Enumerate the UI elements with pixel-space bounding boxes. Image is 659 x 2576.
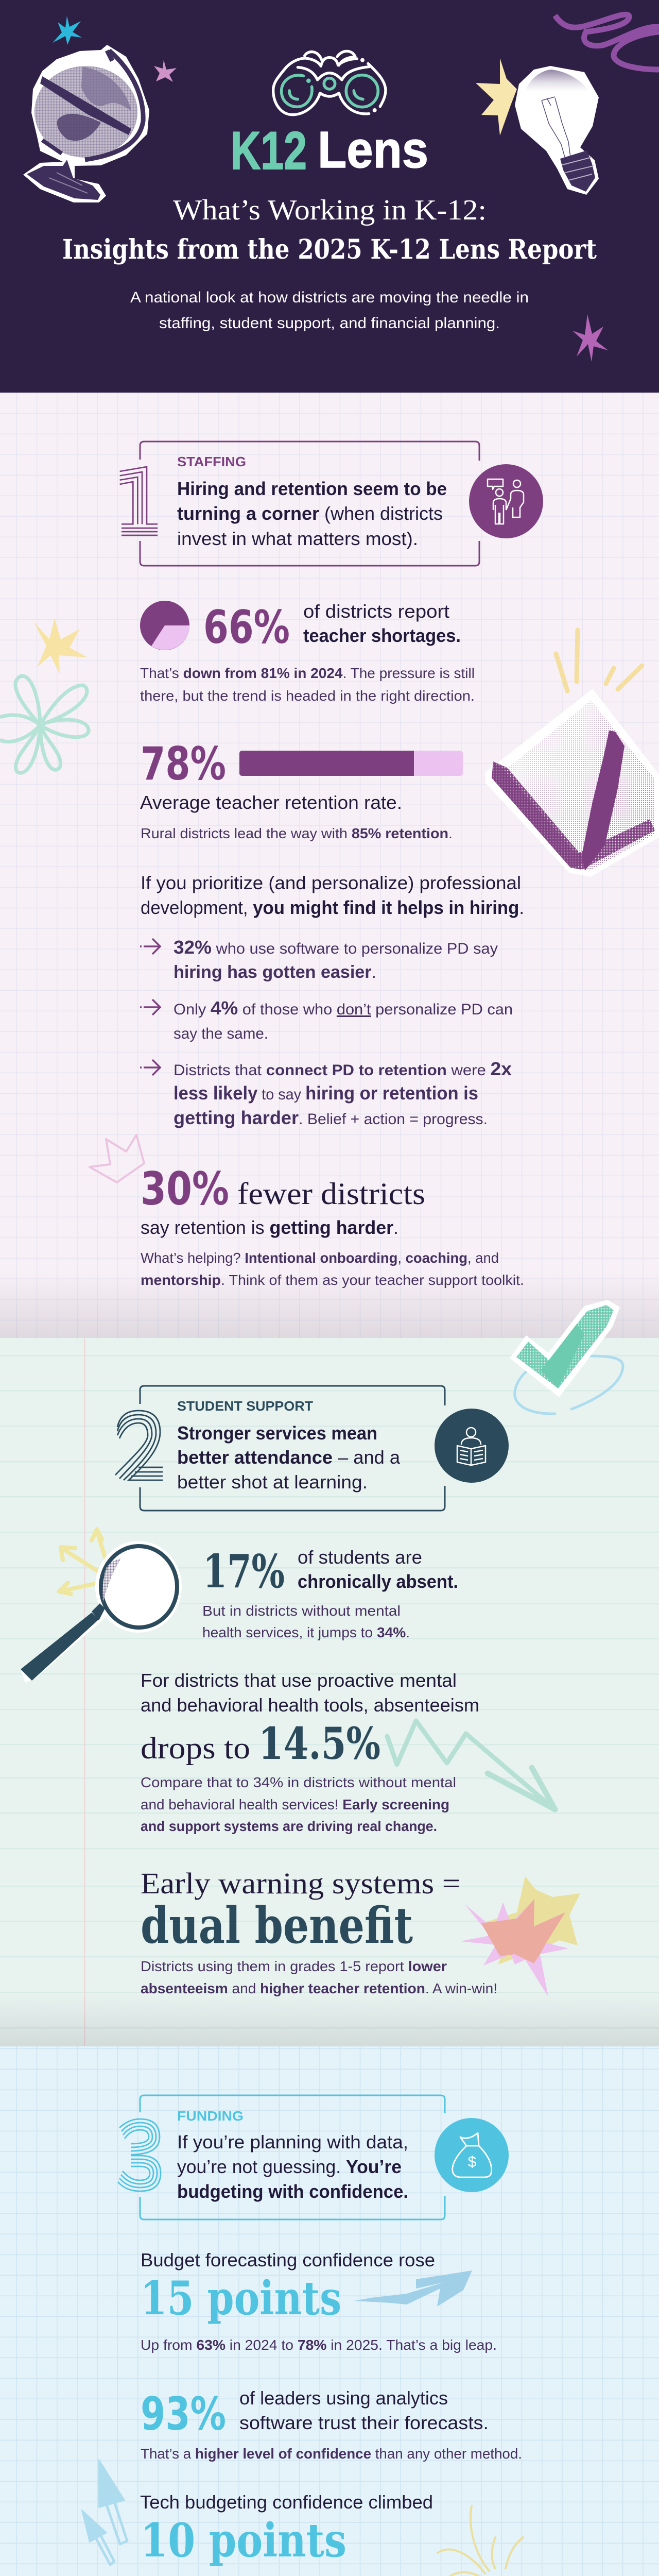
text: what's helping: What’s helping? Intentional onboarding, coaching, and — [141, 1250, 499, 1266]
subtitle: A national look at how districts are moving the needle in — [130, 289, 529, 306]
stat: 78 percent bar: Average teacher retention rate. — [140, 792, 402, 813]
icon: reader with book — [435, 1409, 509, 1483]
text: down from 81 percent: there, but the trend is headed in the right direction. — [140, 688, 475, 704]
stat: 17 percent: chronically absent. — [298, 1571, 458, 1592]
doodle: pink crown — [90, 1135, 144, 1182]
list item: 2x — [174, 1058, 512, 1128]
list item: 2x: getting harder. Belief + action = progress. — [174, 1107, 488, 1128]
doodle: yellow star — [33, 618, 88, 674]
numeral 1 — [120, 467, 158, 535]
illustration: magnifying glass — [21, 1541, 182, 1683]
subtitle — [130, 289, 529, 332]
label: funding: FUNDING — [177, 2108, 244, 2124]
logo: K12 Lens: K12 — [231, 121, 307, 181]
illustration: globe — [23, 45, 149, 202]
section header: student support — [115, 1386, 509, 1511]
text: proactive tools — [141, 1670, 479, 1716]
logo: K12 Lens — [231, 51, 428, 181]
stat: 14.5 percent — [141, 1718, 380, 1770]
text: professional development: If you prioritize (and personalize) professional — [141, 872, 521, 893]
heading: planning with data: you’re not guessing. You’re — [177, 2156, 402, 2177]
text: professional development: development, you might find it helps in hiring. — [141, 897, 524, 918]
box frame — [140, 2095, 445, 2219]
text: districts using them — [141, 1958, 497, 1996]
text: up from 63: Up from 63% in 2024 to 78% in 2025. That’s a big leap. — [141, 2337, 497, 2353]
section header: staffing — [120, 442, 543, 566]
bar chart — [239, 751, 463, 776]
text: without mental health: But in districts without mental — [202, 1603, 401, 1619]
heading: hiring and retention: invest in what matters most). — [177, 528, 418, 549]
icon: money bag: $ — [468, 2154, 477, 2171]
icon: staff people — [469, 464, 543, 538]
heading: stronger services: Stronger services mean — [177, 1422, 377, 1444]
box frame — [140, 1386, 445, 1511]
doodle: yellow arrows — [59, 1529, 105, 1594]
arrow bullet — [140, 939, 160, 954]
subtitle: staffing, student support, and financial planning. — [159, 315, 500, 332]
arrow bullet — [140, 1060, 160, 1075]
scribble: purple loops — [555, 14, 659, 70]
doodle: yellow dashes — [556, 630, 642, 691]
heading: planning with data: budgeting with confidence. — [177, 2181, 408, 2202]
heading: hiring and retention: Hiring and retention seem to be — [177, 478, 447, 499]
illustration: notebook and pen — [485, 689, 659, 877]
text: professional development — [141, 872, 524, 918]
doodle: brush arrow — [354, 2270, 472, 2307]
list item: 2x: less likely to say hiring or retention is — [174, 1082, 478, 1104]
panel: student support — [0, 1300, 659, 2046]
text: without mental health — [202, 1603, 410, 1640]
heading: hiring and retention — [177, 478, 447, 549]
text: down from 81 percent: That’s down from 81% in 2024. The pressure is still — [140, 665, 475, 681]
box frame — [140, 442, 479, 566]
heading: planning with data: If you’re planning with data, — [177, 2131, 408, 2153]
heading: planning with data — [177, 2131, 408, 2202]
list item: 2x: Districts that connect PD to retention were 2x — [174, 1058, 512, 1079]
text: proactive tools: and behavioral health tools, absenteeism — [141, 1694, 479, 1716]
heading: dual benefit — [141, 1867, 460, 1955]
stat: 66 percent: 66% — [203, 601, 290, 654]
title — [62, 194, 597, 265]
doodle: up arrows — [82, 2460, 127, 2565]
text: down from 81 percent — [140, 665, 475, 704]
icon: pink star — [154, 60, 177, 82]
stat: 78 percent bar — [140, 737, 463, 841]
stat: 30 percent: fewer districts — [237, 1177, 425, 1211]
doodle: burst shapes — [460, 1876, 580, 1997]
heading: dual benefit: dual benefit — [141, 1896, 413, 1955]
logo: K12 Lens: Lens — [318, 121, 428, 179]
icon: yellow star — [476, 58, 517, 135]
list item: 32 percent: hiring has gotten easier. — [174, 962, 376, 982]
text: proactive tools: For districts that use proactive mental — [141, 1670, 457, 1691]
text: tech budgeting: Tech budgeting confidence climbed — [140, 2492, 433, 2513]
numeral 2 — [115, 1411, 163, 1480]
stat: 17 percent — [203, 1544, 458, 1598]
text: what's helping — [141, 1250, 524, 1288]
stat: 30 percent: say retention is getting harder. — [141, 1217, 398, 1238]
doodle: blue circle — [515, 1356, 623, 1414]
panel: staffing — [0, 393, 659, 1338]
text: higher level of confidence: That’s a higher level of confidence than any other method. — [141, 2446, 522, 2462]
panel: header — [0, 0, 659, 393]
doodle: zigzag arrow — [387, 1721, 555, 1809]
doodle: mint flower — [0, 676, 89, 773]
heading: stronger services: better attendance – and a — [177, 1447, 401, 1468]
stat: 14.5 percent: 14.5% — [258, 1718, 380, 1770]
stat: 30 percent: 30% — [141, 1162, 229, 1215]
stat: 78 percent bar: 78% — [141, 737, 226, 790]
text: without mental health: health services, it jumps to 34%. — [202, 1624, 410, 1640]
stat: 17 percent: of students are — [298, 1547, 422, 1568]
list item: 4 percent: say the same. — [174, 1025, 268, 1042]
stat: 66 percent — [140, 601, 461, 654]
list item: 4 percent — [174, 997, 513, 1042]
panel: funding — [0, 2046, 659, 2576]
stat: 66 percent: teacher shortages. — [303, 625, 461, 646]
list item: 32 percent — [174, 937, 498, 982]
doodle: yellow sprays — [438, 2506, 523, 2576]
icon: mauve star — [573, 314, 608, 362]
stat: 14.5 percent: drops to — [141, 1731, 250, 1765]
text: compare: and behavioral health services! Early screening — [141, 1797, 449, 1812]
numeral 3 — [118, 2119, 161, 2191]
heading: dual benefit: Early warning systems = — [141, 1867, 460, 1900]
stat: 93 percent: software trust their forecasts. — [239, 2412, 489, 2433]
title: What’s Working in K-12: — [173, 194, 487, 226]
icon: binoculars — [273, 51, 386, 115]
stat: 78 percent bar: Rural districts lead the way with 85% retention. — [141, 825, 453, 841]
text: compare: and support systems are driving real change. — [141, 1818, 437, 1834]
label: staffing: STAFFING — [177, 454, 246, 469]
text: what's helping: mentorship. Think of them as your teacher support toolkit. — [141, 1272, 524, 1288]
list: PD findings — [140, 937, 513, 1128]
text: budget forecasting: Budget forecasting confidence rose — [141, 2249, 435, 2270]
stat: 66 percent: of districts report — [303, 601, 449, 622]
heading: stronger services — [177, 1422, 401, 1493]
stat: 17 percent: 17% — [203, 1544, 285, 1598]
pie chart — [140, 601, 189, 650]
stat: 30 percent — [141, 1162, 425, 1238]
illustration: light bulb — [515, 66, 599, 195]
text: districts using them: Districts using them in grades 1-5 report lower — [141, 1958, 447, 1974]
stat: 93 percent: 93% — [141, 2387, 226, 2441]
stat: 10 points: 10 points — [141, 2513, 346, 2568]
stat: 93 percent — [141, 2387, 489, 2441]
stat: 15 points: 15 points — [141, 2271, 341, 2326]
heading: hiring and retention: turning a corner (when districts — [177, 503, 443, 524]
heading: stronger services: better shot at learning. — [177, 1471, 368, 1493]
stat: 93 percent: of leaders using analytics — [239, 2387, 448, 2409]
text: compare — [141, 1774, 456, 1834]
icon: blue star — [53, 16, 82, 45]
text: districts using them: absenteeism and higher teacher retention. A win-win! — [141, 1980, 497, 1996]
arrow bullet — [140, 999, 160, 1015]
text: compare: Compare that to 34% in districts without mental — [141, 1774, 456, 1790]
illustration: check mark — [510, 1300, 620, 1397]
section header: funding — [118, 2095, 509, 2219]
list item: 32 percent: 32% who use software to personalize PD say — [174, 937, 498, 958]
list item: 4 percent: Only 4% of those who don’t personalize PD can — [174, 997, 513, 1019]
label: student support: STUDENT SUPPORT — [177, 1398, 313, 1414]
icon: money bag — [435, 2118, 509, 2192]
